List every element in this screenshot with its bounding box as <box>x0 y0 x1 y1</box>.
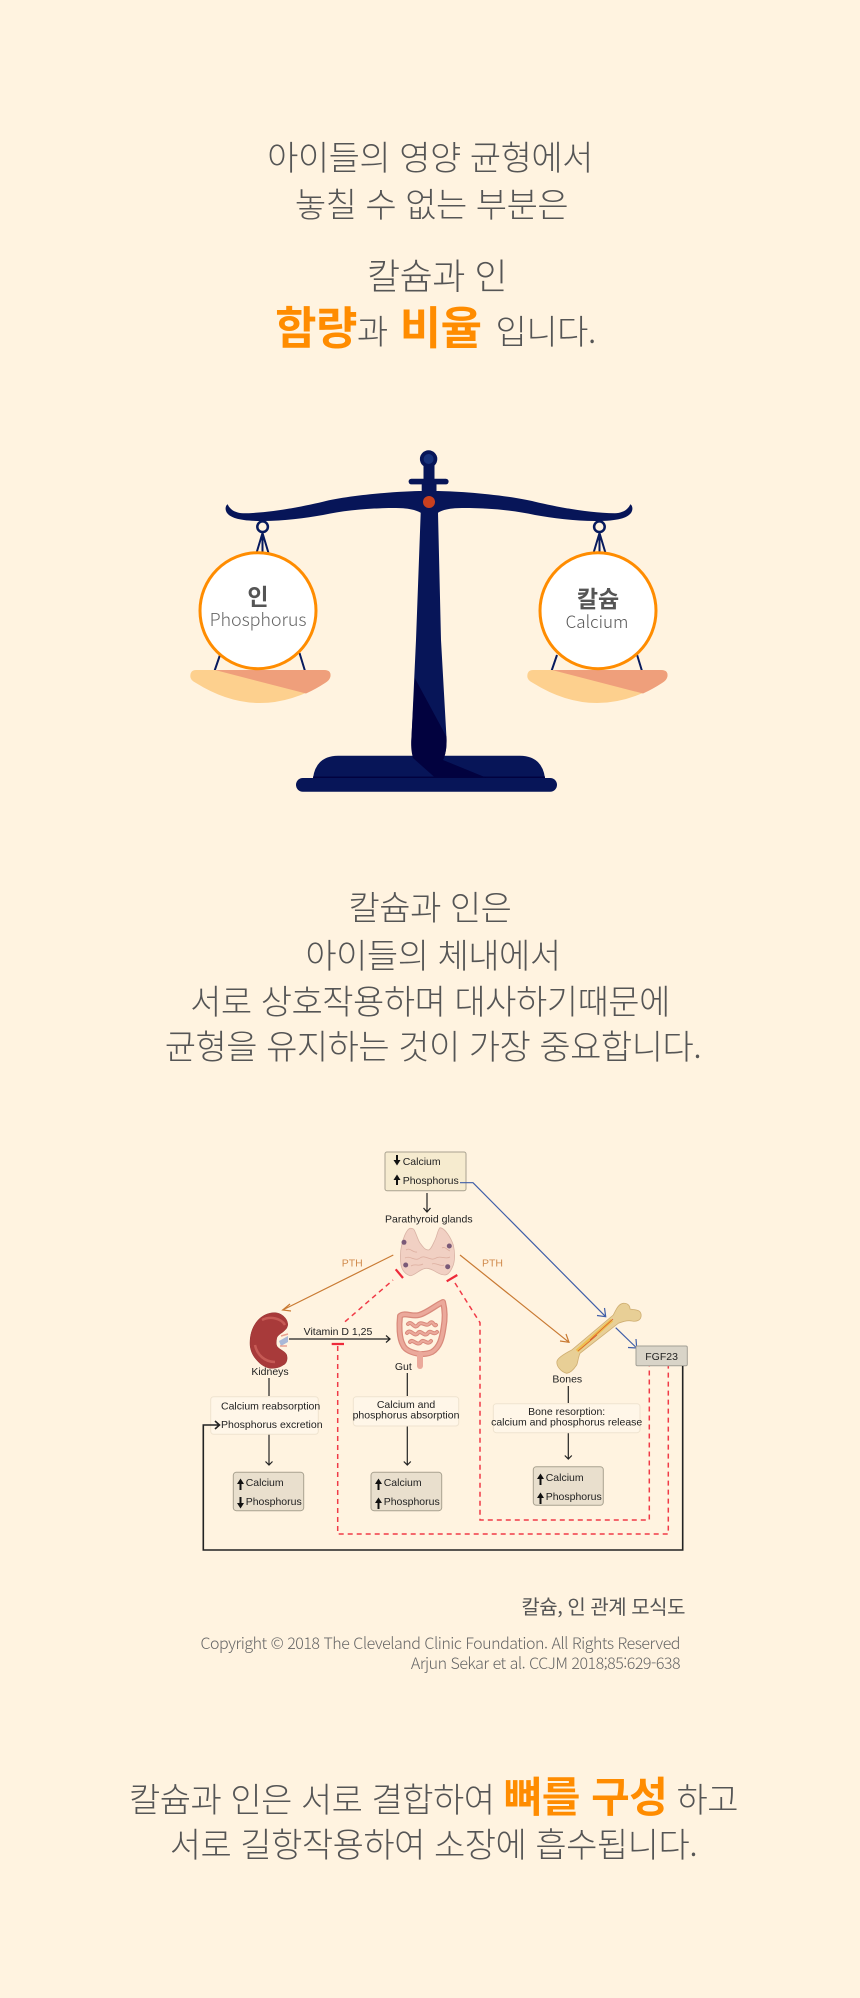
copyright note: Arjun Sekar et al. CCJM 2018;85:629-638 <box>411 1650 680 1674</box>
parathyroid label: Parathyroid glands <box>385 1214 473 1226</box>
FGF23 box: FGF23 <box>645 1351 678 1363</box>
scale rings <box>257 521 605 532</box>
vitamin D arrow <box>289 1336 390 1342</box>
bone connectors <box>565 1386 572 1459</box>
gut process box: phosphorus absorption <box>353 1410 460 1422</box>
bone result box <box>533 1467 603 1505</box>
left circle: phosphorus <box>200 553 316 669</box>
bone process box: Bone resorption: <box>528 1406 605 1418</box>
kidney illustration <box>250 1313 288 1368</box>
gut result box: Calcium <box>384 1477 422 1489</box>
closing statement <box>129 1764 738 1867</box>
scale pole and beam <box>226 450 632 761</box>
closing line 2: 서로 길항작용하여 소장에 흡수됩니다. <box>170 1818 697 1867</box>
down arrow <box>394 1155 400 1166</box>
middle explanatory text <box>165 881 701 1069</box>
vitamin D label: Vitamin D 1,25 <box>304 1326 372 1338</box>
pivot dot <box>423 496 435 508</box>
bone result box: Calcium <box>546 1472 584 1484</box>
intro line 2: 놓칠 수 없는 부분은 <box>295 178 568 227</box>
gut result box: Phosphorus <box>384 1496 440 1508</box>
kidney process box: Calcium reabsorption <box>221 1400 320 1412</box>
FGF23 box <box>636 1346 687 1366</box>
heading: intro text <box>267 131 596 357</box>
middle line 1: 칼슘과 인은 <box>349 881 511 930</box>
diagram caption: 칼슘, 인 관계 모식도 <box>521 1591 685 1620</box>
gut illustration <box>399 1302 445 1366</box>
phosphorus english label: Phosphorus <box>210 606 306 632</box>
red dashed inhibition lines <box>338 1280 668 1534</box>
middle line 2: 아이들의 체내에서 <box>305 929 561 978</box>
scale stand base <box>296 756 557 792</box>
closing line 1: 칼슘과 인은 서로 결합하여 뼈를 구성 하고 <box>129 1764 738 1825</box>
copyright note: Copyright © 2018 The Cleveland Clinic Foundation. All Rights Reserved <box>200 1630 680 1654</box>
scale pole shadow <box>411 678 487 778</box>
PTH arrow to kidneys <box>283 1255 393 1311</box>
arrow to parathyroid <box>424 1193 430 1212</box>
bone process box: calcium and phosphorus release <box>491 1417 642 1429</box>
left pan <box>190 670 331 703</box>
middle line 4: 균형을 유지하는 것이 가장 중요합니다. <box>165 1020 701 1069</box>
phosphorus korean label: 인 <box>247 578 269 612</box>
bone illustration <box>557 1303 641 1373</box>
intro line 4 with highlights: 함량과 비율 입니다. <box>275 292 596 357</box>
kidney connectors <box>266 1378 272 1465</box>
right pan <box>527 670 668 703</box>
bone result box: Phosphorus <box>546 1491 602 1503</box>
copyright note <box>200 1630 680 1674</box>
kidney process box <box>211 1397 323 1434</box>
middle line 3: 서로 상호작용하며 대사하기때문에 <box>190 975 670 1024</box>
right circle: calcium <box>540 553 656 669</box>
bone process box <box>491 1404 642 1433</box>
bones label: Bones <box>552 1374 582 1386</box>
kidney result box: Phosphorus <box>246 1496 302 1508</box>
calcium korean label: 칼슘 <box>577 580 619 614</box>
PTH label right: PTH <box>482 1258 503 1270</box>
gut result box <box>371 1472 442 1511</box>
top status box <box>385 1152 466 1191</box>
kidneys label: Kidneys <box>251 1366 289 1378</box>
gut label: Gut <box>395 1361 412 1373</box>
PTH arrow to bones <box>460 1255 569 1342</box>
intro line 1: 아이들의 영양 균형에서 <box>267 131 593 180</box>
scale hanging strings <box>214 533 642 671</box>
top status box: Calcium <box>403 1156 441 1168</box>
knob highlight <box>424 454 434 464</box>
blue arrow to FGF23 <box>616 1328 637 1348</box>
top status box: Phosphorus <box>403 1175 459 1187</box>
parathyroid gland illustration <box>400 1228 455 1276</box>
blue arrow to bone <box>460 1183 606 1317</box>
kidney process box: Phosphorus excretion <box>221 1419 323 1431</box>
kidney result box: Calcium <box>246 1477 284 1489</box>
calcium english label: Calcium <box>566 608 628 633</box>
gut process box <box>353 1397 460 1426</box>
feedback line from FGF23 to kidneys <box>203 1366 683 1550</box>
inhibition bars <box>332 1269 457 1344</box>
gut connectors <box>404 1373 411 1465</box>
gut process box: Calcium and <box>377 1399 435 1411</box>
up arrow <box>394 1174 400 1185</box>
kidney result box <box>233 1472 304 1511</box>
intro line 3: 칼슘과 인 <box>367 248 507 300</box>
PTH label left: PTH <box>342 1258 363 1270</box>
